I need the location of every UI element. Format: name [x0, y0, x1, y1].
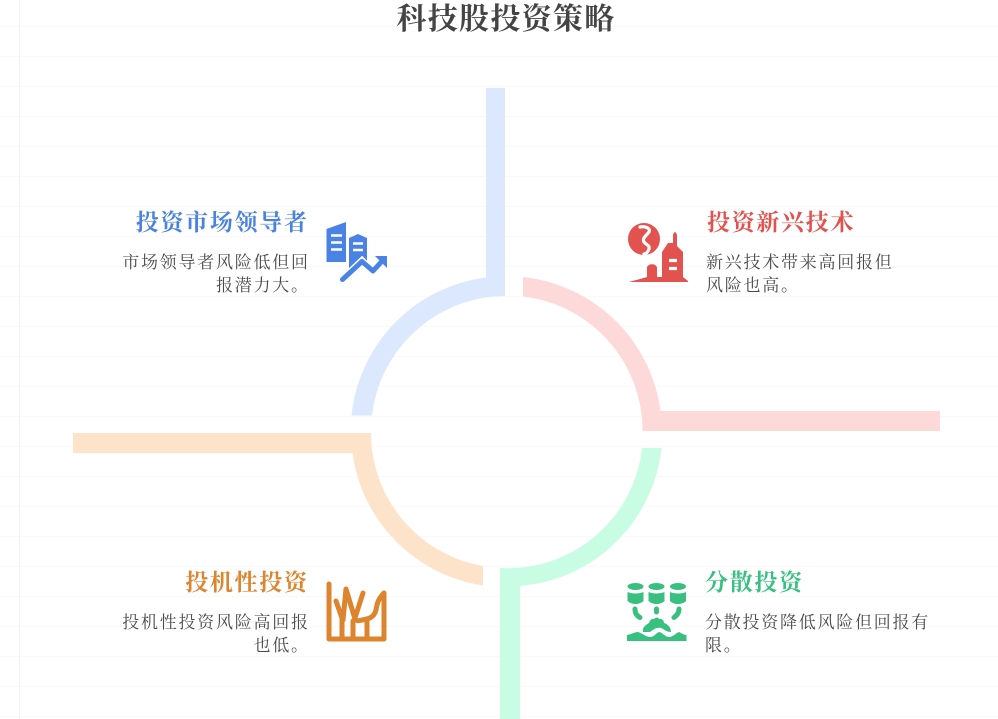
- text: speculative investing: 也低。: [254, 636, 310, 655]
- icon: green cylinders and splash: [627, 583, 686, 641]
- icon: buildings with rising arrow: [326, 222, 387, 281]
- heading: emerging technology: 投资新兴技术: [707, 210, 855, 235]
- ring segment: red, emerging technology: [523, 277, 940, 431]
- title: 科技股投资策略: [396, 3, 616, 36]
- text: speculative investing: 投机性投资风险高回报: [122, 613, 310, 632]
- text: market leaders: 报潜力大。: [216, 276, 310, 295]
- heading: market leaders: 投资市场领导者: [136, 210, 309, 235]
- ring segment: green, diversified investing: [500, 448, 662, 719]
- heading: speculative investing: 投机性投资: [185, 570, 309, 595]
- text: emerging technology: 风险也高。: [706, 276, 800, 295]
- text: speculative investing: [122, 613, 310, 655]
- heading: diversified investing: 分散投资: [705, 570, 804, 595]
- text: emerging technology: 新兴技术带来高回报但: [706, 253, 894, 272]
- ring segment: orange, speculative investing: [73, 433, 483, 586]
- text: emerging technology: [706, 253, 894, 295]
- text: market leaders: 市场领导者风险低但回: [122, 253, 310, 272]
- icon: orange crop field: [329, 584, 384, 639]
- text: diversified investing: 分散投资降低风险但回报有: [705, 613, 930, 632]
- text: diversified investing: 限。: [705, 636, 742, 655]
- ring segment: blue, market leaders: [352, 88, 505, 416]
- icon: globe and factory: [628, 223, 688, 282]
- text: diversified investing: [705, 613, 930, 655]
- text: market leaders: [122, 253, 310, 295]
